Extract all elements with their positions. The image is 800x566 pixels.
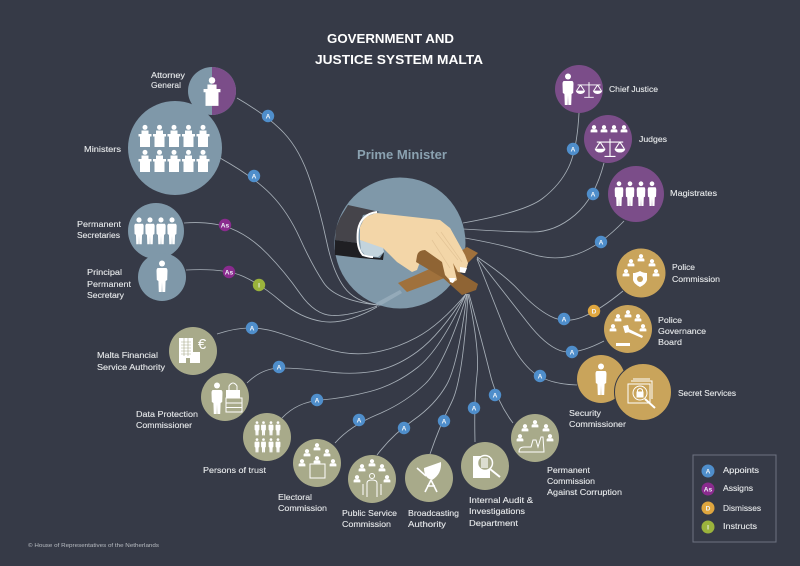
- label: Secret Services: [678, 388, 736, 398]
- label: Judges: [639, 134, 667, 144]
- title: [315, 31, 484, 67]
- legend: appoints: Appoints: [723, 465, 759, 475]
- icon: busts and group outline: [354, 459, 390, 497]
- label: Principal: [87, 267, 122, 277]
- icon: fingers: [428, 221, 468, 283]
- badges on the lines: A: [252, 174, 257, 180]
- badges on the lines: A: [599, 240, 604, 246]
- label: [547, 465, 622, 497]
- panel: malta financial service authority: [97, 327, 217, 375]
- label: Commission: [547, 476, 595, 486]
- legend: [693, 455, 776, 542]
- label: [97, 350, 166, 372]
- label: General: [151, 80, 181, 90]
- label: [278, 492, 327, 513]
- icon: ten lecterns: [138, 125, 210, 172]
- badges on the lines: D: [592, 308, 597, 316]
- connection lines: [184, 98, 624, 455]
- icon: folders and magnifier: [628, 379, 655, 408]
- label: Chief Justice: [609, 84, 658, 94]
- credit: © House of Representatives of the Netherlands: [28, 542, 159, 549]
- badges on the lines: A: [442, 418, 447, 426]
- badges on the lines: A: [266, 114, 271, 120]
- badges on the lines: A: [357, 418, 362, 424]
- title: GOVERNMENT AND: [327, 31, 454, 46]
- icon: person and lock: [212, 382, 242, 414]
- label: Commissioner: [136, 420, 192, 430]
- legend: assigns: [702, 482, 753, 496]
- label: Permanent: [77, 219, 122, 229]
- icon: hand: [360, 213, 468, 283]
- label: Broadcasting: [408, 508, 459, 518]
- badges on the lines: I: [258, 282, 260, 290]
- label: Internal Audit &: [469, 495, 533, 505]
- label: Attorney: [151, 70, 186, 80]
- legend: assigns: Assigns: [723, 483, 753, 493]
- badges on the lines: A: [538, 374, 543, 380]
- panel: persons of trust: [203, 413, 291, 475]
- panel: secret services: [614, 364, 736, 420]
- panel: security commissioner: [569, 355, 626, 429]
- label: Malta Financial: [97, 350, 158, 360]
- legend: appoints: A: [706, 468, 711, 476]
- badges on the lines: As: [221, 222, 230, 230]
- icon: four persons: [134, 217, 177, 244]
- icon: busts and gavel: [610, 310, 646, 346]
- icon: busts and scale: [591, 125, 627, 156]
- panel: ministers: [84, 101, 222, 195]
- label: [151, 70, 186, 90]
- panel: judges: [584, 115, 667, 163]
- label: Commission: [278, 503, 327, 513]
- label: Commission: [672, 274, 720, 284]
- icon: marionette cross: [398, 247, 478, 295]
- label: Police: [672, 262, 695, 272]
- label: Permanent: [547, 465, 591, 475]
- icon: person: [596, 364, 606, 395]
- label: Permanent: [87, 279, 132, 289]
- badges on the lines: A: [591, 192, 596, 198]
- title: JUSTICE SYSTEM MALTA: [315, 52, 484, 67]
- panel: broadcasting authority: [405, 454, 459, 529]
- icon: building and euro: €: [198, 336, 207, 353]
- label: Ministers: [84, 144, 121, 154]
- label: [672, 262, 720, 284]
- label: Magistrates: [670, 188, 717, 198]
- label: Data Protection: [136, 409, 198, 419]
- legend: assigns: As: [704, 486, 713, 494]
- panel: prime minister: [334, 148, 478, 308]
- icon: cuff inner shadow: [360, 240, 384, 257]
- icon: busts and outline: [517, 420, 553, 452]
- legend: instructs: Instructs: [723, 521, 757, 531]
- legend: instructs: [702, 520, 757, 534]
- icon: busts and ballot box: [299, 443, 336, 478]
- icon: shirt cuff: [358, 212, 377, 257]
- label: Secretaries: [77, 230, 120, 240]
- heading: Prime Minister: Prime Minister: [357, 148, 447, 162]
- icon: light streak from cross: [376, 290, 402, 307]
- label: Police: [658, 315, 682, 325]
- badges on the lines: A: [315, 398, 320, 404]
- badges on the lines: [219, 110, 607, 434]
- circle: attorney general split: [188, 67, 236, 115]
- label: [569, 408, 626, 429]
- panel: public service commission: [342, 455, 397, 529]
- label: Security: [569, 408, 602, 418]
- panel: chief justice: [555, 65, 658, 113]
- label: Commissioner: [569, 419, 626, 429]
- label: Public Service: [342, 508, 397, 518]
- panel: electoral commission: [278, 439, 341, 513]
- panel: permanent secretaries: [77, 203, 184, 259]
- panel: principal permanent secretary: [87, 253, 186, 301]
- panel: magistrates: [608, 166, 717, 222]
- icon: person: [156, 260, 168, 292]
- badges on the lines: A: [402, 426, 407, 432]
- label: Authority: [408, 519, 447, 529]
- label: Electoral: [278, 492, 312, 502]
- panel: internal audit: [461, 442, 533, 528]
- legend: dismisses: D: [706, 506, 711, 512]
- label: Secretary: [87, 290, 125, 300]
- label: Board: [658, 337, 682, 347]
- icon: busts and shield: [623, 254, 659, 287]
- circle: prime minister background: [334, 178, 466, 308]
- icon: sleeve: [335, 205, 384, 260]
- badges on the lines: A: [571, 146, 576, 154]
- label: [408, 508, 459, 529]
- badges on the lines: A: [472, 406, 477, 412]
- panel: permanent commission against corruption: [511, 414, 622, 497]
- badges on the lines: A: [562, 316, 567, 324]
- legend: appoints: [702, 464, 759, 478]
- legend: dismisses: Dismisses: [723, 503, 761, 513]
- label: Persons of trust: [203, 465, 267, 475]
- label: [136, 409, 198, 430]
- icon: person with scale: [562, 74, 602, 105]
- label: [469, 495, 533, 528]
- label: [342, 508, 397, 529]
- badges on the lines: A: [493, 392, 498, 400]
- label: Commission: [342, 519, 391, 529]
- badges on the lines: A: [570, 350, 575, 356]
- badges on the lines: As: [225, 270, 234, 276]
- icon: four persons: [615, 181, 656, 206]
- panel: police governance board: [604, 305, 706, 353]
- label: [77, 219, 122, 240]
- label: [87, 267, 132, 300]
- label: Service Authority: [97, 362, 166, 372]
- panel: data protection commissioner: [136, 373, 249, 430]
- panel: police commission: [616, 248, 720, 298]
- label: Governance: [658, 326, 706, 336]
- label: Against Corruption: [547, 487, 622, 497]
- label: Investigations: [469, 506, 525, 516]
- icon: satellite dish: [417, 462, 441, 492]
- legend: dismisses: [702, 502, 761, 514]
- icon: document and magnifier: [473, 456, 500, 478]
- label: Department: [469, 518, 519, 528]
- icon: lectern: [204, 77, 220, 106]
- badges on the lines: A: [277, 364, 282, 372]
- legend: instructs: I: [707, 524, 709, 532]
- icon: eight persons: [255, 421, 280, 452]
- panel: attorney general: [151, 67, 236, 115]
- label: [658, 315, 706, 347]
- badges on the lines: A: [250, 326, 255, 332]
